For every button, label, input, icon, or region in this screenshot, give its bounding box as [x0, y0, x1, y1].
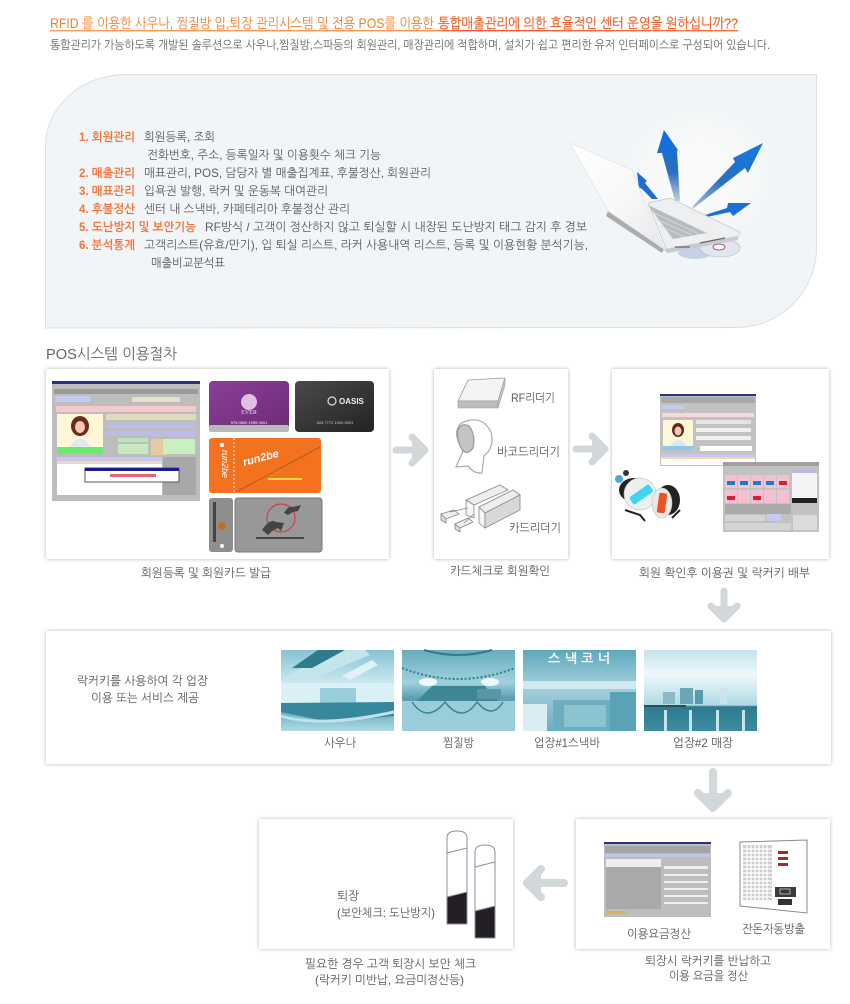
icon: RF reader [458, 378, 505, 408]
feature list text: 센터 내 스낵바, 카페테리아 후불정산 관리 [144, 202, 350, 216]
panel: feature list [46, 74, 816, 328]
caption: payment [645, 954, 771, 983]
card: orange [209, 438, 321, 493]
feature list text: 회원등록, 조회 [144, 130, 215, 144]
text: service description: 이용 또는 서비스 제공 [91, 691, 199, 705]
feature list text [79, 130, 588, 270]
card: black: 528 7772 1000 0001 [317, 420, 354, 425]
screenshot: member confirm [660, 394, 756, 466]
panel: card readers [434, 369, 568, 559]
screenshot: payment software [604, 842, 711, 917]
card: orange: run2be [220, 450, 230, 478]
label: card reader: 카드리더기 [509, 521, 561, 535]
feature list text: 6. 분석통계 [79, 238, 135, 252]
caption: payment: 이용 요금을 정산 [669, 969, 748, 983]
card: purple: 975 0600 1955 0001 [231, 420, 268, 425]
icon: kiosk machine [740, 840, 807, 913]
feature list text: 2. 매출관리 [79, 166, 135, 180]
arrow: right 2 [576, 436, 605, 462]
feature list text: 입욕권 발행, 락커 및 운동복 대여관리 [144, 184, 328, 198]
card: purple [209, 381, 289, 432]
arrow: right 1 [396, 437, 425, 463]
heading: POS procedure: POS시스템 이용절차 [46, 346, 178, 363]
feature list text: 5. 도난방지 및 보안기능 [79, 220, 197, 234]
caption: shop: 업장#2 매장 [673, 736, 733, 750]
card: orange: run2be [242, 448, 280, 469]
title: RFID 를 이용한 사우나, 찜질방 입,퇴장 관리시스템 및 전용 POS를 이용한 [50, 15, 435, 31]
card: purple: EVER [241, 410, 257, 416]
card: gray [209, 498, 322, 552]
feature list text: 매출비교분석표 [151, 256, 225, 270]
caption: member registration: 회원등록 및 회원카드 발급 [141, 566, 271, 580]
arrow: left [527, 869, 564, 897]
photo: snack bar: 스낵코너 [548, 651, 610, 666]
photo: jjimjilbang [402, 650, 515, 731]
caption: ticket and locker key: 회원 확인후 이용권 및 락커키 배부 [639, 566, 810, 580]
label: auto change: 잔돈자동방출 [742, 922, 805, 936]
feature list text: 매표관리, POS, 담당자 별 매출집계표, 후불정산, 회원관리 [144, 166, 431, 180]
caption: security check [305, 957, 476, 987]
title: 통합매출관리에 의한 효율적인 센터 운영을 원하십니까?? [438, 15, 738, 31]
text: exit security: (보안체크: 도난방지) [337, 906, 435, 920]
caption: snack bar: 업장#1스낵바 [534, 736, 600, 750]
label: RF reader: RF리더기 [511, 391, 555, 405]
text: service description: 락커키를 사용하여 각 업장 [77, 674, 208, 688]
arrow: down 2 [698, 772, 728, 808]
label: barcode reader: 바코드리더기 [497, 445, 560, 459]
photo: snack bar [523, 650, 636, 731]
screenshot: locker grid [723, 462, 819, 532]
caption: sauna: 사우나 [324, 736, 356, 750]
caption: security check: (락커키 미반납, 요금미정산등) [315, 973, 464, 987]
panel: security gate [259, 819, 513, 949]
feature list text: RF방식 / 고객이 정산하지 않고 퇴실할 시 내장된 도난방지 태그 감지 후 경보 [205, 220, 587, 234]
caption: security check: 필요한 경우 고객 퇴장시 보안 체크 [305, 957, 476, 971]
icon: security gates [447, 831, 495, 938]
photo: sauna [281, 650, 394, 731]
icon: laptop with arrows [570, 120, 763, 259]
card: black: OASIS [339, 397, 365, 406]
panel: member registration [46, 369, 389, 559]
arrow: down 1 [711, 591, 737, 619]
feature list text: 고객리스트(유효/만기), 입 퇴실 리스트, 라커 사용내역 리스트, 등록 및 이용현황 분석기능, [144, 238, 588, 252]
text: exit security: 퇴장 [337, 889, 359, 903]
feature list text: 3. 매표관리 [79, 184, 135, 198]
feature list text: 1. 회원관리 [79, 130, 135, 144]
text: exit security [337, 889, 435, 920]
subtitle: 통합관리가 가능하도록 개발된 솔루션으로 사우나,찜질방,스파등의 회원관리, 매장관리에 적합하며, 설치가 쉽고 편리한 유저 인터페이스로 구성되어 있습니다. [50, 38, 770, 52]
panel: payment [576, 819, 830, 949]
screenshot: member software [52, 381, 200, 501]
caption: jjimjilbang: 찜질방 [443, 736, 474, 750]
label: fee settlement: 이용요금정산 [627, 927, 691, 941]
feature list text: 4. 후불정산 [79, 202, 136, 216]
feature list text: 전화번호, 주소, 등록일자 및 이용횟수 체크 기능 [147, 148, 381, 162]
icon: card reader [441, 485, 520, 532]
panel: ticket and locker key [612, 369, 829, 559]
card: black [295, 381, 374, 432]
photo: shop [644, 650, 757, 731]
icon: barcode reader [456, 420, 492, 473]
icon: locker keys [615, 470, 680, 521]
caption: card check: 카드체크로 회원확인 [450, 564, 550, 578]
panel: service facilities [46, 631, 831, 764]
text: service description [77, 674, 208, 705]
title [50, 15, 738, 31]
caption: payment: 퇴장시 락커키를 반납하고 [645, 954, 771, 968]
